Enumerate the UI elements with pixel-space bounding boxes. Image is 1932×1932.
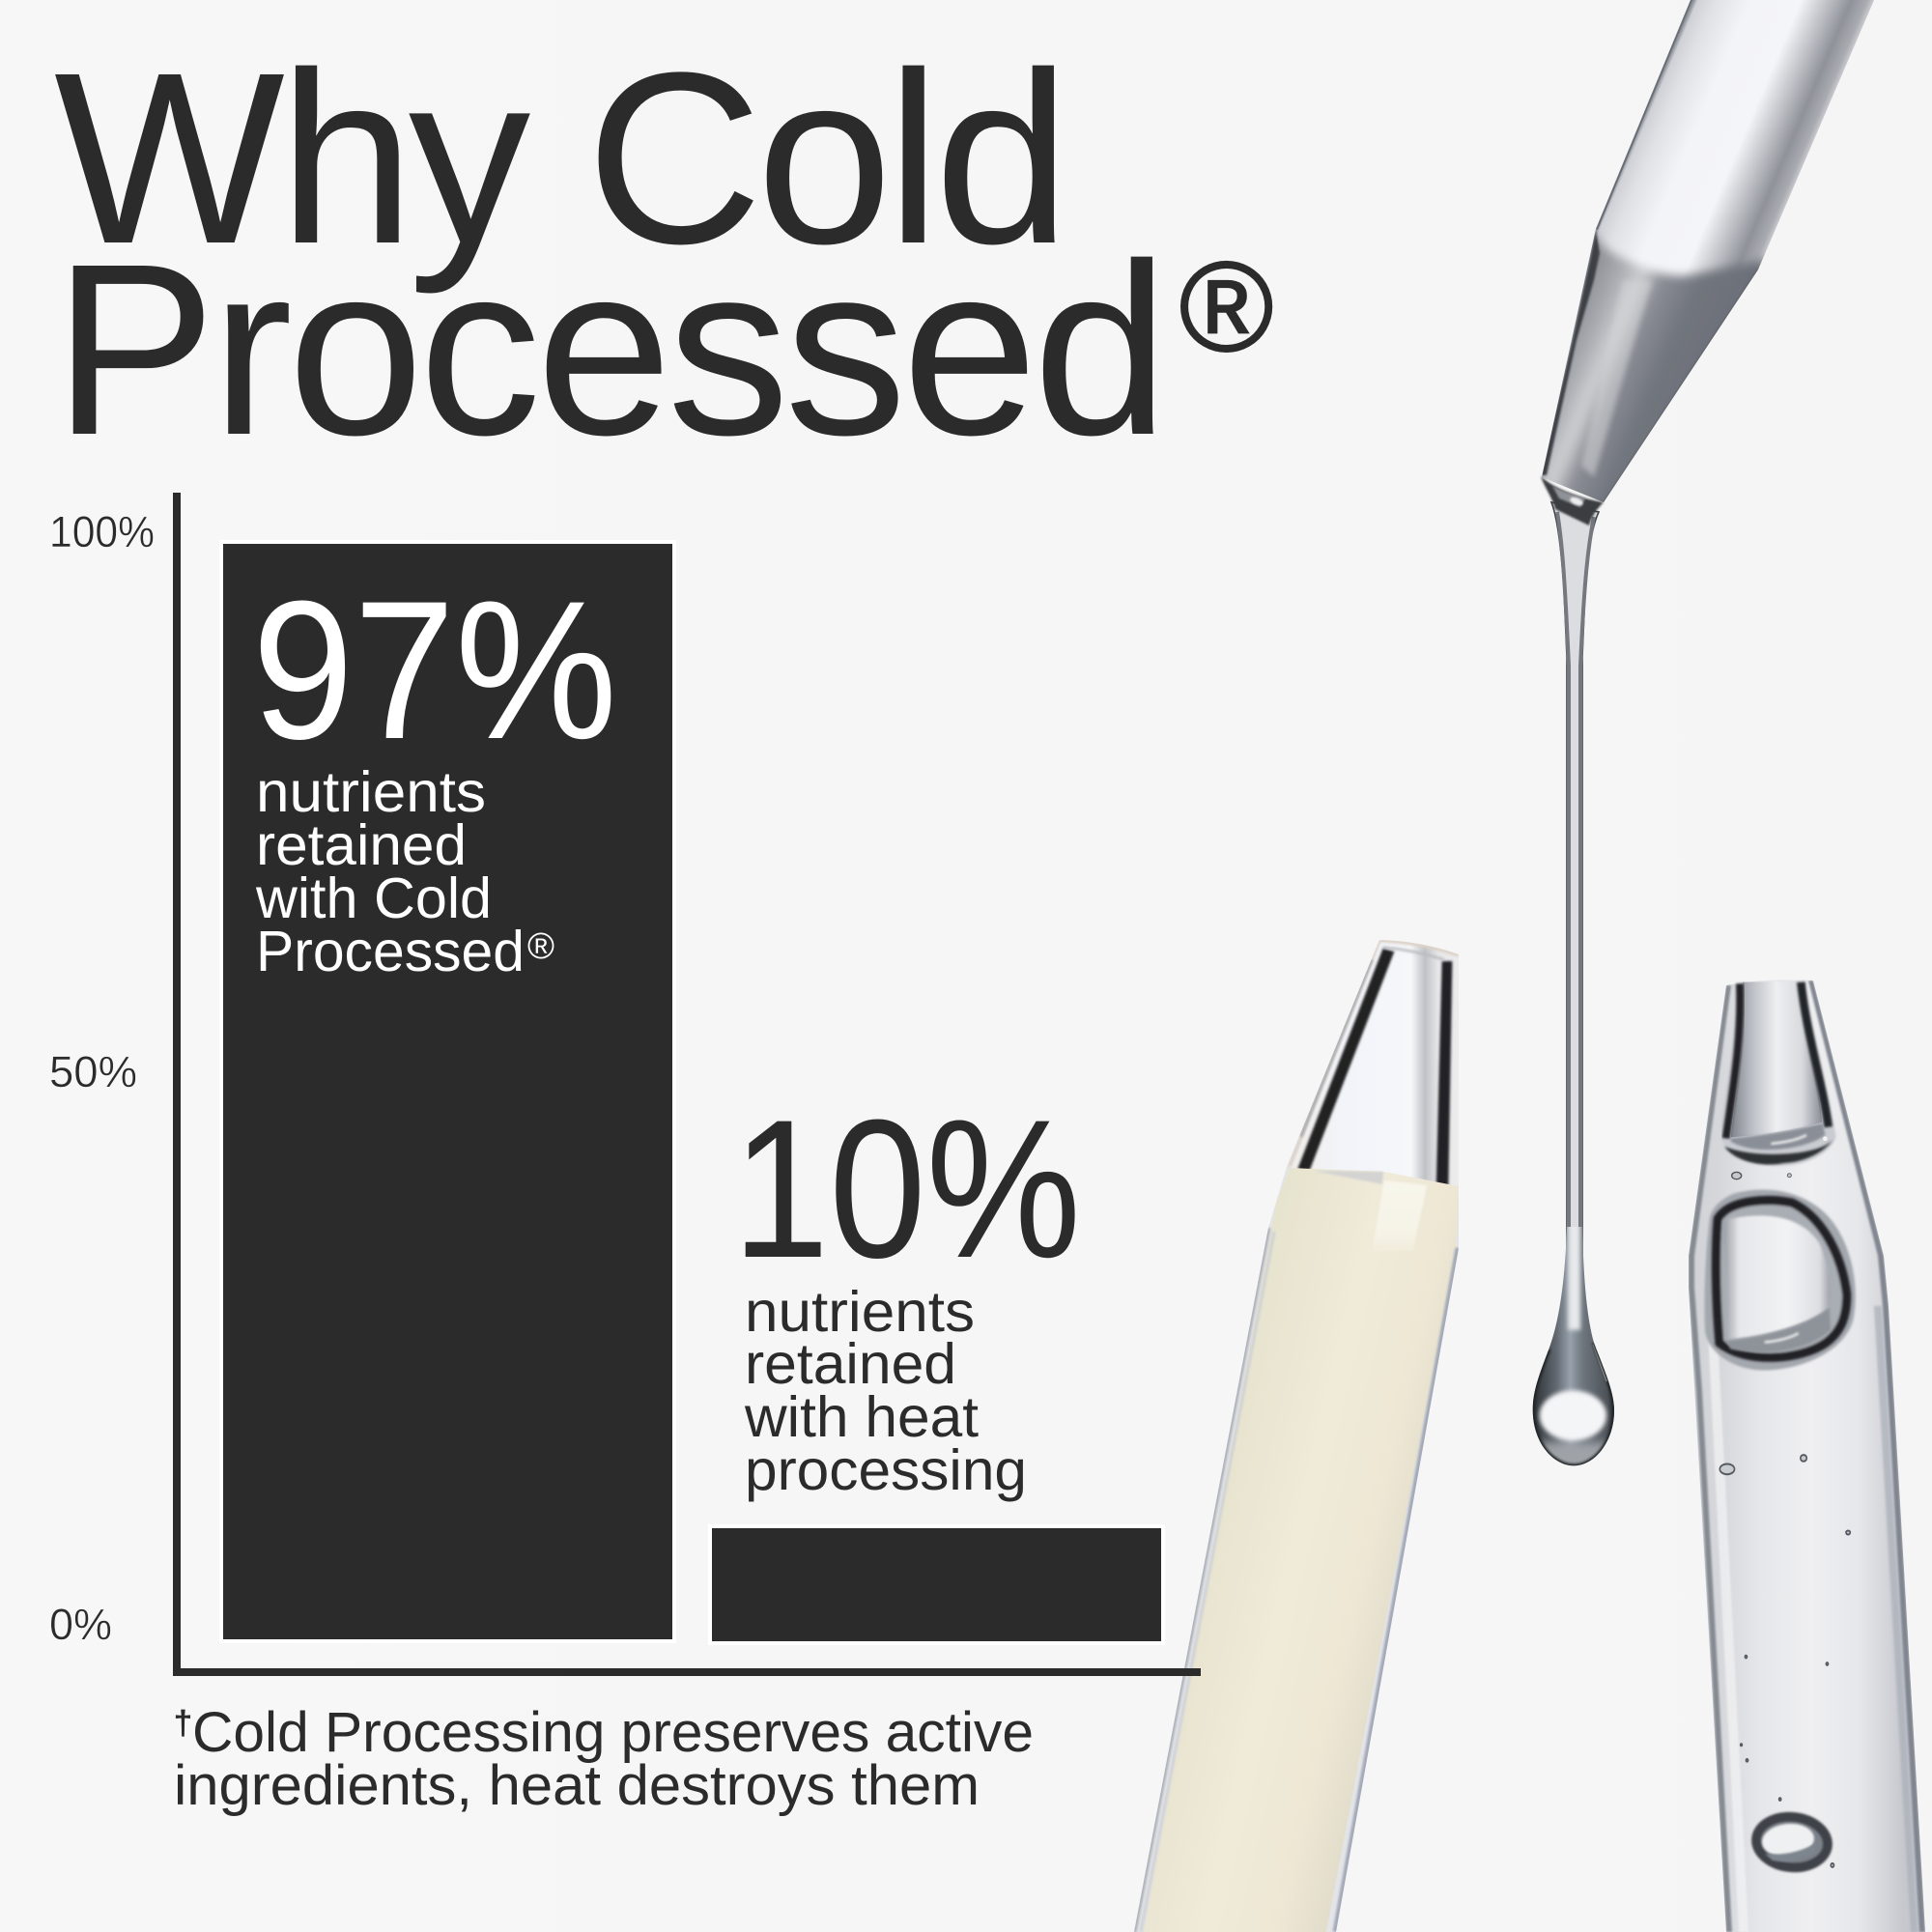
title: Processed (53, 213, 1169, 486)
bar: cold processed 97%: retained (256, 813, 467, 877)
bar: cold processed 97% (219, 540, 676, 1643)
y axis labels: 100% (49, 507, 155, 556)
falling oil stream (1541, 476, 1604, 1256)
cream-filled dropper (1130, 937, 1463, 1932)
top glass dropper (1542, 0, 1874, 502)
title: Why Cold (54, 21, 1070, 295)
y axis labels: 0% (49, 1600, 112, 1649)
footnote: Cold Processing preserves active (192, 1701, 1034, 1764)
cream liquid (1143, 1168, 1459, 1932)
bar: heat processing 10%: 10% (732, 1079, 1081, 1299)
lower air pocket (1705, 1190, 1856, 1371)
clear serum dropper (1686, 976, 1932, 1932)
bar: cold processed 97%: Processed (256, 920, 525, 983)
tip reflection (1375, 1180, 1427, 1248)
chart axes (173, 493, 1201, 1676)
lower bubble (1753, 1813, 1831, 1871)
title (53, 21, 1273, 486)
silver empty tip (1290, 940, 1459, 1188)
bar: heat processing 10%: processing (745, 1438, 1027, 1502)
bar: heat processing 10%: nutrients (745, 1280, 975, 1344)
bar: heat processing 10%: with heat (744, 1385, 979, 1449)
bar chart (49, 493, 1201, 1676)
upper air pocket (1721, 981, 1836, 1166)
y axis labels: 50% (49, 1047, 137, 1096)
footnote (174, 1701, 1034, 1817)
bar: heat processing 10% (708, 1079, 1165, 1645)
oil drop (1532, 1227, 1614, 1466)
dropper tip ring (1541, 476, 1604, 526)
bubbles near the pockets (1732, 1172, 1791, 1179)
footnote: † (174, 1705, 192, 1742)
bar: heat processing 10%: retained (745, 1332, 956, 1396)
tiny bubbles (1719, 1455, 1850, 1867)
y axis labels (49, 507, 155, 1649)
bar: cold processed 97%: with Cold (255, 867, 492, 930)
footnote: ingredients, heat destroys them (174, 1754, 980, 1817)
glass edges (1134, 1228, 1268, 1932)
bar: cold processed 97%: 97% (252, 560, 617, 781)
title: ® (1179, 236, 1273, 378)
bar: cold processed 97%: ® (527, 926, 554, 967)
bar: cold processed 97%: nutrients (256, 760, 486, 824)
